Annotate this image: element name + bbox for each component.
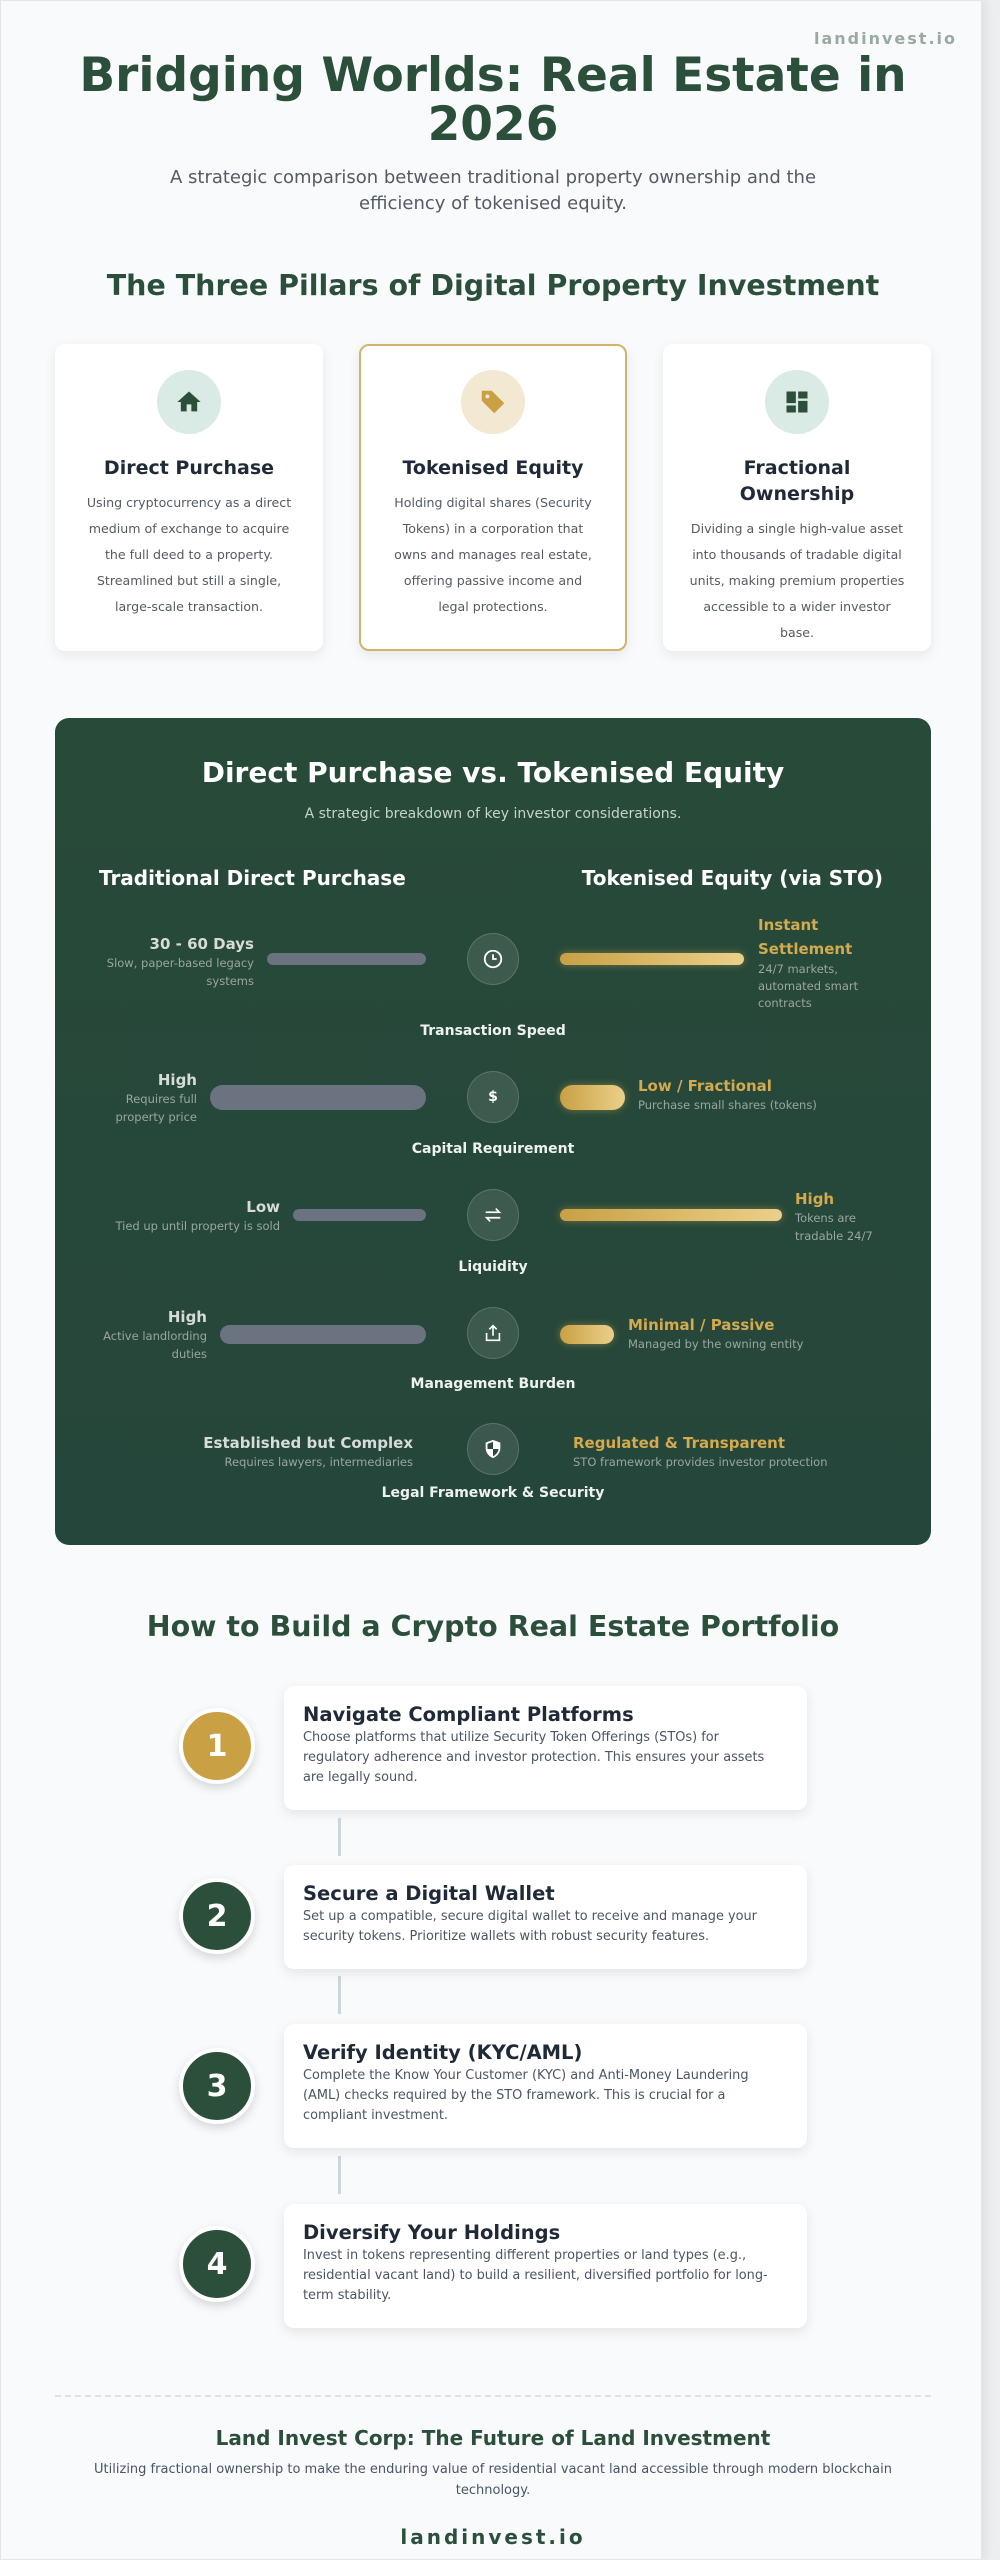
icon: swap arrows <box>467 1189 519 1241</box>
right value: Low / Fractional <box>638 1077 772 1095</box>
left bar <box>293 1209 426 1221</box>
icon: house <box>157 370 221 434</box>
right bar <box>560 1209 782 1221</box>
card title: Tokenised Equity <box>402 457 584 479</box>
right value <box>638 1077 817 1112</box>
row: capital requirement <box>115 1071 817 1157</box>
category label: Transaction Speed <box>420 1023 566 1039</box>
row: liquidity <box>115 1189 873 1275</box>
left value <box>103 1308 207 1361</box>
icon: clock <box>467 933 519 985</box>
right bar <box>560 1085 625 1110</box>
card title: Ownership <box>740 483 854 505</box>
step 4 card <box>284 2204 807 2328</box>
category label: Capital Requirement <box>412 1141 574 1157</box>
column header right: Tokenised Equity (via STO) <box>582 866 883 890</box>
step 2 card <box>284 1865 807 1969</box>
right value: Managed by the owning entity <box>628 1337 803 1351</box>
left value: Established but Complex <box>203 1434 413 1452</box>
panel: comparison <box>55 718 931 1545</box>
heading: three pillars: The Three Pillars of Digital Property Investment <box>107 269 879 302</box>
left bar <box>220 1325 426 1344</box>
left value: Active landlording duties <box>103 1329 207 1361</box>
right bar <box>560 953 744 965</box>
right value: Purchase small shares (tokens) <box>638 1098 817 1112</box>
card text: Holding digital shares (Security Tokens) in a corporation that owns and manages real estate, offering passive income and legal protections. <box>394 495 592 614</box>
panel: direct purchase card <box>55 344 323 651</box>
left bar <box>267 953 426 965</box>
step 3 number <box>179 2048 255 2124</box>
left value: Tied up until property is sold <box>115 1219 280 1233</box>
step 3 card: Verify Identity (KYC/AML) <box>303 2041 582 2064</box>
icon: tag <box>461 370 525 434</box>
right value <box>628 1316 803 1351</box>
step 2 number <box>179 1878 255 1954</box>
card title: Fractional <box>744 457 850 479</box>
connector <box>338 1818 341 1856</box>
step 1 number: 1 <box>207 1728 227 1764</box>
right value: Tokens are tradable 24/7 <box>795 1211 873 1243</box>
step 3 card <box>284 2024 807 2148</box>
panel subtitle: A strategic breakdown of key investor considerations. <box>305 806 681 822</box>
card text: Dividing a single high-value asset into thousands of tradable digital units, making premium properties accessible to a wider investor base. <box>690 521 904 640</box>
step 4 card: Diversify Your Holdings <box>303 2221 560 2244</box>
left value <box>107 935 254 988</box>
right value <box>758 916 858 1010</box>
category label: Management Burden <box>411 1376 575 1392</box>
left bar <box>210 1085 426 1110</box>
step 3 card: Complete the Know Your Customer (KYC) and Anti-Money Laundering (AML) checks required by the STO framework. This is crucial for a compliant investment. <box>303 2068 748 2123</box>
icon: grid <box>765 370 829 434</box>
icon: shield <box>467 1423 519 1475</box>
card title <box>740 457 854 505</box>
right value: 24/7 markets, automated smart contracts <box>758 962 858 1010</box>
column header left: Traditional Direct Purchase <box>99 866 406 890</box>
left value <box>115 1071 197 1124</box>
heading: portfolio steps: How to Build a Crypto Real Estate Portfolio <box>147 1610 839 1643</box>
left value: Requires full property price <box>115 1092 197 1124</box>
icon: share <box>467 1307 519 1359</box>
right value: Regulated & Transparent <box>573 1434 785 1452</box>
step 1 card: Choose platforms that utilize Security Token Offerings (STOs) for regulatory adherence and investor protection. This ensures your assets are legally sound. <box>303 1730 764 1785</box>
footer title: Land Invest Corp: The Future of Land Investment <box>216 2426 770 2450</box>
footer brand: landinvest.io <box>400 2525 586 2549</box>
left value: High <box>168 1308 207 1326</box>
subtitle: A strategic comparison between traditional property ownership and the efficiency of tokenised equity. <box>170 167 816 214</box>
left value: Low <box>246 1198 280 1216</box>
row: legal framework <box>203 1423 827 1501</box>
panel: tokenised equity card <box>359 344 627 651</box>
title: Bridging Worlds: Real Estate in 2026 <box>79 48 907 152</box>
row: management burden <box>103 1307 803 1392</box>
right value: Minimal / Passive <box>628 1316 774 1334</box>
right value <box>795 1190 873 1243</box>
left value: High <box>158 1071 197 1089</box>
card title: Direct Purchase <box>104 457 274 479</box>
connector <box>338 1976 341 2014</box>
footer text: Utilizing fractional ownership to make the enduring value of residential vacant land accessible through modern blockchain technology. <box>94 2462 892 2498</box>
left value <box>115 1198 280 1233</box>
step 3 number: 3 <box>207 2068 227 2104</box>
step 4 number: 4 <box>207 2246 227 2282</box>
right value: Instant Settlement <box>758 916 852 958</box>
icon: dollar <box>467 1071 519 1123</box>
left value: 30 - 60 Days <box>150 935 254 953</box>
right value: High <box>795 1190 834 1208</box>
step 2 number: 2 <box>207 1898 227 1934</box>
panel title: Direct Purchase vs. Tokenised Equity <box>202 756 784 789</box>
right bar <box>560 1325 614 1344</box>
step 4 card: Invest in tokens representing different properties or land types (e.g., residential vacant land) to build a resilient, diversified portfolio for long-term stability. <box>303 2248 768 2303</box>
panel: fractional ownership card <box>663 344 931 651</box>
step 2 card: Secure a Digital Wallet <box>303 1882 555 1905</box>
left value <box>203 1434 413 1469</box>
step 1 card: Navigate Compliant Platforms <box>303 1703 634 1726</box>
category label: Legal Framework & Security <box>382 1485 604 1501</box>
connector <box>338 2156 341 2194</box>
brand tag: landinvest.io <box>814 29 957 48</box>
step 1 card <box>284 1686 807 1810</box>
step 2 card: Set up a compatible, secure digital wallet to receive and manage your security tokens. Prioritize wallets with robust security features. <box>303 1909 757 1944</box>
left value: Requires lawyers, intermediaries <box>224 1455 413 1469</box>
step 4 number <box>179 2226 255 2302</box>
icon: dollar: $ <box>488 1089 498 1105</box>
left value: Slow, paper-based legacy systems <box>107 956 254 988</box>
step 1 number <box>179 1708 255 1784</box>
category label: Liquidity <box>458 1259 528 1275</box>
row: transaction speed <box>107 916 858 1039</box>
card text: Using cryptocurrency as a direct medium of exchange to acquire the full deed to a property. Streamlined but still a single, large-scale transaction. <box>87 495 291 614</box>
right value: STO framework provides investor protection <box>573 1455 827 1469</box>
right value <box>573 1434 827 1469</box>
